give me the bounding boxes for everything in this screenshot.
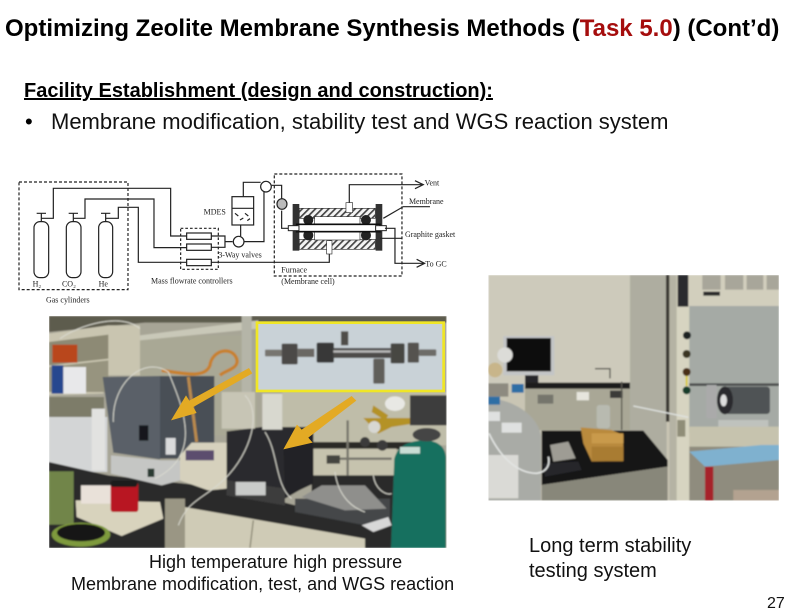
- schematic labels: [33, 178, 456, 304]
- fume hood top: [689, 275, 779, 307]
- glass bottle and stand: [597, 405, 610, 428]
- lab instrument left: [49, 417, 107, 472]
- bullet point: •: [25, 109, 33, 134]
- schematic labels: 3-Way valves: [218, 250, 262, 259]
- mass flowrate controllers: [181, 228, 329, 269]
- furnace base: [111, 455, 180, 485]
- title: Optimizing Zeolite Membrane Synthesis Methods (Task 5.0) (Cont’d): [5, 15, 779, 42]
- wooden boxes: [581, 427, 623, 461]
- stool: [49, 471, 74, 525]
- caption: stability testing system: [529, 535, 691, 582]
- tube furnace: [725, 387, 770, 414]
- cabinets: [184, 507, 365, 548]
- stand clamp: [339, 420, 392, 476]
- bullet point: Membrane modification, stability test and WGS reaction system: [51, 109, 668, 134]
- monitor: [503, 336, 554, 375]
- three-way valves and MDES bubbler: [232, 181, 288, 247]
- regulator: [497, 347, 513, 363]
- back bench: [525, 383, 630, 389]
- hood window: [689, 306, 779, 433]
- caption: high temperature system: High temperature high pressure: [149, 552, 402, 572]
- photo: long term stability testing system: [488, 275, 779, 501]
- furnace and membrane cell: [274, 174, 430, 276]
- black desk: [542, 431, 668, 485]
- schematic labels: Membrane: [409, 197, 444, 206]
- valve knobs: [683, 331, 691, 394]
- schematic diagram: membrane reaction system: [19, 174, 456, 304]
- section heading: Facility Establishment (design and construction):: [24, 80, 493, 102]
- green cylinder: [391, 440, 446, 548]
- gas cylinders group: [19, 182, 187, 290]
- schematic labels: H₂: [33, 279, 41, 288]
- schematic labels: To GC: [425, 260, 447, 269]
- schematic labels: Mass flowrate controllers: [151, 276, 233, 285]
- outlet: [677, 420, 685, 437]
- wires: [60, 321, 392, 525]
- coiled orange tube: [162, 351, 237, 375]
- controller box: [180, 443, 227, 490]
- tube to hood: [633, 406, 688, 417]
- schematic labels: MDES: [204, 207, 226, 216]
- caption: stability testing system: testing system: [529, 560, 657, 582]
- caption: stability testing system: Long term stability: [529, 535, 691, 557]
- caption: high temperature system: [71, 552, 454, 594]
- gas rig tray: [295, 499, 390, 525]
- right counter and dark bench area: [312, 442, 412, 449]
- shelf unit: [49, 325, 140, 395]
- schematic labels: Furnace: [281, 266, 307, 275]
- dark furnace: [227, 427, 313, 499]
- gas cylinder: [488, 398, 541, 501]
- schematic labels: (Membrane cell): [281, 277, 335, 286]
- large grey furnace: [103, 376, 160, 459]
- photo: high temperature high pressure lab setup: [49, 316, 447, 548]
- schematic labels: Gas cylinders: [46, 295, 90, 304]
- keyboard and laptop: [550, 442, 576, 462]
- schematic labels: CO₂: [62, 279, 76, 288]
- hood lower: [689, 426, 779, 433]
- caption: high temperature system: Membrane modification, test, and WGS reaction: [71, 574, 454, 594]
- cell part in insert: [317, 343, 334, 363]
- regulator: [385, 396, 405, 411]
- page number: 27: [767, 595, 785, 612]
- insert background: [257, 323, 444, 391]
- schematic labels: Vent: [425, 178, 440, 187]
- schematic labels: He: [99, 279, 108, 288]
- schematic labels: Graphite gasket: [405, 230, 456, 239]
- yellow insert frame: [257, 323, 444, 391]
- column: [628, 275, 667, 458]
- bench top: [49, 461, 313, 548]
- orange arrows: [171, 368, 356, 449]
- drawer: [76, 500, 163, 536]
